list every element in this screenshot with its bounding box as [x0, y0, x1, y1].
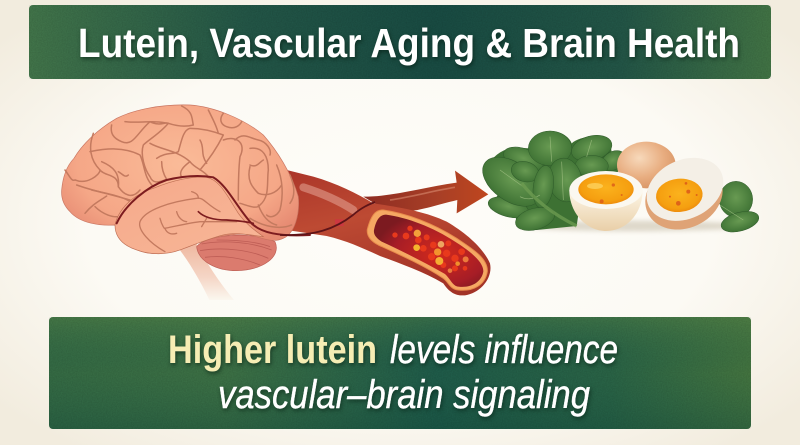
- temporal lobe folds: [140, 192, 237, 252]
- artery in brain: [117, 176, 310, 235]
- whole egg: [617, 142, 676, 188]
- title banner: [29, 5, 771, 79]
- temporal lobe: [115, 177, 263, 254]
- vessel highlight: [303, 187, 353, 210]
- ground shadow: [520, 221, 747, 231]
- cerebrum: [62, 105, 299, 254]
- vessel small mark: [335, 219, 344, 226]
- illustration: brain: [62, 105, 310, 300]
- leaf veins: [500, 137, 743, 226]
- caption line 2: vascular–brain signaling: [218, 373, 590, 417]
- artery over vessel: [280, 202, 375, 235]
- illustration: spinach and eggs: [474, 131, 761, 242]
- caption line 1: Higher lutein: [168, 328, 377, 372]
- vessel lumen: [374, 215, 483, 287]
- blood cells: [392, 226, 469, 273]
- illustration: blood vessel: [287, 170, 490, 295]
- front egg half: [569, 171, 643, 231]
- vessel wall: [287, 170, 490, 295]
- brain stem: [179, 244, 234, 300]
- bottom caption banner: [49, 317, 751, 429]
- cerebellum: [197, 235, 276, 271]
- caption line 1: levels influence: [390, 328, 618, 372]
- title text: Lutein, Vascular Aging & Brain Health: [78, 20, 740, 66]
- spinach leaves: [474, 131, 761, 236]
- brain folds: [65, 106, 294, 227]
- arrow: from vessel to food: [363, 171, 488, 213]
- spinach backing: [485, 132, 623, 230]
- caption line 1: [168, 328, 618, 372]
- vessel cut wall: [367, 210, 487, 290]
- right egg half: [634, 146, 734, 242]
